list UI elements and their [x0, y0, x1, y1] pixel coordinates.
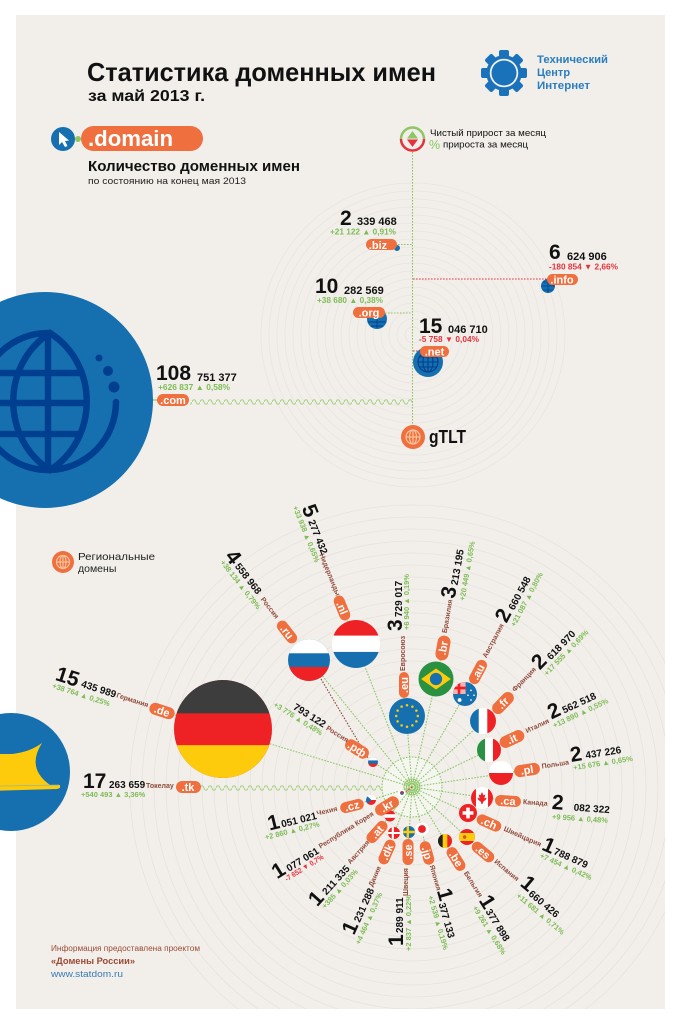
- label: .au Австралия: [458, 561, 545, 690]
- Tokelau circle: [0, 713, 70, 831]
- label: .ca Канада: .ca: [500, 795, 517, 808]
- label: .be Бельгия: [437, 840, 525, 957]
- flag: Denmark: [388, 827, 400, 839]
- label: .ru Россия: +38 134 ▲ 0,79%: [218, 558, 263, 611]
- label: .ru Россия: Россия: [259, 596, 280, 620]
- flag: Spain: [459, 829, 475, 845]
- legend text: Чистый прирост за месяц: [430, 128, 547, 139]
- label: .cz Чехия: 051 021: [280, 811, 318, 830]
- label: .es Испания: 1: [516, 871, 540, 897]
- label: .de Германия: 435 989: [80, 679, 118, 701]
- label: .рф Россия: [272, 692, 372, 764]
- stat: .com: +626 837 ▲ 0,58%: [158, 383, 230, 392]
- label: .kr Республика Корея: 077 061: [285, 846, 322, 874]
- label: .au Австралия: 660 548: [507, 575, 534, 612]
- label: .nl Нидерланды: +33 938 ▲ 0,65%: [291, 505, 322, 564]
- label: .cz Чехия: [259, 790, 367, 842]
- label: .it Италия: Италия: [525, 718, 551, 735]
- .domain badge: .domain: [88, 126, 173, 151]
- legend text: [429, 128, 547, 152]
- label: .pl Польша: 2: [568, 742, 584, 767]
- label: .es Испания: .es: [473, 843, 492, 862]
- label: .es Испания: Испания: [493, 859, 520, 883]
- stat: .com: 108: [156, 362, 191, 385]
- label: .fr Франция: Франция: [511, 666, 538, 694]
- label: .eu Евросоюз: 3: [384, 619, 407, 631]
- label: .se Швеция: Швеция: [403, 868, 410, 896]
- label: .se Швеция: .se: [403, 844, 415, 860]
- label: .se Швеция: 289 911: [395, 897, 406, 933]
- stat: .org: 10: [315, 275, 338, 298]
- label: .br Бразилия: Бразилия: [442, 599, 454, 634]
- label: .it Италия: +13 890 ▲ 0,55%: [551, 696, 610, 730]
- flag: Poland: [489, 761, 513, 785]
- label: .br Бразилия: .br: [437, 639, 451, 656]
- label: .dk Дания: 1: [338, 918, 363, 938]
- label: .kr Республика Корея: 1: [268, 858, 290, 884]
- label: .cz Чехия: .cz: [344, 799, 361, 814]
- label: .рф Россия: Россия: [325, 725, 349, 744]
- stat: .biz: 339 468: [357, 216, 397, 228]
- label: .jp Япония: [411, 837, 470, 951]
- label: .nl Нидерланды: 277 432: [305, 518, 329, 556]
- label: .fr Франция: [484, 614, 591, 723]
- label: .cz Чехия: 1: [265, 810, 282, 836]
- label: .eu Евросоюз: 729 017: [394, 580, 405, 617]
- flag: Belgium: [438, 834, 452, 848]
- globe: .com: [0, 292, 153, 508]
- label: .au Австралия: .au: [470, 663, 488, 682]
- stat: .net: -5 758 ▼ 0,04%: [419, 335, 479, 344]
- label: .fr Франция: +17 555 ▲ 0,69%: [542, 628, 591, 677]
- heading: domain count: Количество доменных имен: [88, 158, 300, 175]
- flag: Russia small: [368, 757, 378, 767]
- label: .be Бельгия: 1: [474, 891, 500, 913]
- connector: Russia to .рф: [321, 679, 368, 758]
- label: .be Бельгия: +9 261 ▲ 0,68%: [471, 904, 508, 957]
- label: .at Австрия: Австрия: [347, 840, 371, 866]
- label: .se Швеция: [385, 839, 415, 951]
- legend: regional domains: [52, 551, 155, 575]
- label: .be Бельгия: Бельгия: [462, 870, 483, 899]
- label: .tk Токелау: 263 659: [109, 780, 146, 791]
- label: .ch Швейцария: 788 879: [552, 846, 590, 871]
- logo: Технический Центр Интернет: Интернет: [537, 80, 591, 92]
- stat: .net: 15: [419, 315, 443, 338]
- label: .de Германия: [51, 663, 179, 728]
- label: .рф Россия: .рф: [345, 739, 368, 760]
- label: .tk Токелау: 17: [83, 770, 106, 793]
- label: .tk Токелау: .tk: [182, 782, 195, 794]
- label: .рф Россия: +3 776 ▲ 0,48%: [272, 700, 325, 738]
- flag: Austria: [384, 810, 396, 822]
- label: .br Бразилия: +20 449 ▲ 0,65%: [458, 540, 477, 601]
- flag: Netherlands: [332, 620, 380, 668]
- label: .ca Канада: +9 956 ▲ 0,48%: [552, 812, 609, 825]
- label: .kr Республика Корея: .kr: [379, 798, 397, 815]
- stat: .info: [541, 241, 618, 293]
- stat: .info: 6: [549, 241, 561, 264]
- wave connector .com: [190, 399, 412, 405]
- stat: .net: [413, 315, 488, 377]
- label: .ca Канада: Канада: [523, 799, 548, 808]
- label: .pl Польша: +15 676 ▲ 0,65%: [573, 754, 634, 772]
- label: .es Испания: 660 426: [526, 889, 561, 921]
- stat: .net: .net: [425, 346, 445, 358]
- label: .be Бельгия: .be: [446, 849, 465, 869]
- label: .de Германия: .de: [152, 704, 171, 720]
- legend text: %: [429, 138, 440, 152]
- flag: Czechia: [366, 795, 376, 805]
- label: .ca Канада: 2: [551, 791, 564, 815]
- label: .ru Россия: [217, 546, 307, 650]
- flag: Sweden: [403, 826, 415, 838]
- label: .kr Республика Корея: [268, 787, 405, 887]
- label: .eu Евросоюз: .eu: [399, 677, 411, 693]
- label: .рф Россия: 793 122: [291, 702, 328, 731]
- label: .jp Япония: +2 539 ▲ 0,19%: [426, 894, 450, 951]
- flag: Russia: [288, 639, 330, 681]
- label: .fr Франция: 2: [527, 650, 552, 674]
- label: .pl Польша: 437 226: [585, 745, 623, 762]
- label: .fr Франция: .fr: [495, 695, 512, 712]
- footer: source: www.statdom.ru: [50, 969, 123, 980]
- label: .jp Япония: 377 133: [436, 902, 456, 940]
- footer: source: Информация предоставлена проектом: [51, 944, 200, 953]
- label: .nl Нидерланды: Нидерланды: [317, 553, 341, 597]
- flag: Italy: [477, 738, 501, 762]
- label: .dk Дания: .dk: [379, 842, 397, 862]
- stat: .com: 751 377: [197, 372, 237, 384]
- label: .at Австрия: 211 335: [321, 863, 353, 898]
- label: .eu Евросоюз: +6 940 ▲ 0,19%: [402, 574, 411, 630]
- stat: .info: 624 906: [567, 251, 607, 263]
- label: .jp Япония: Япония: [428, 864, 442, 891]
- label: .ru Россия: 4: [220, 546, 246, 569]
- label: .au Австралия: Австралия: [482, 623, 506, 659]
- label: .cz Чехия: Чехия: [316, 806, 338, 818]
- label: .tk Токелау: Токелау: [146, 783, 174, 790]
- label: .ca Канада: [494, 787, 611, 825]
- label: .pl Польша: .pl: [520, 764, 534, 778]
- stat: .biz: +21 122 ▲ 0,91%: [330, 228, 396, 236]
- label: .kr Республика Корея: -7 652 ▼ 0,7%: [283, 852, 325, 883]
- label: .be Бельгия: 377 898: [483, 907, 511, 944]
- label: .br Бразилия: 3: [437, 585, 462, 600]
- label: .it Италия: [492, 678, 610, 754]
- label: .se Швеция: 1: [385, 934, 408, 946]
- gTLD axis and connectors: [385, 152, 548, 426]
- logo: Технический Центр Интернет: Технический: [537, 54, 608, 66]
- label: .ch Швейцария: 1: [539, 833, 559, 859]
- label: .at Австрия: [304, 814, 397, 913]
- flag: Japan: [416, 822, 428, 836]
- stat: .net: 046 710: [448, 324, 488, 336]
- label: .at Австрия: .at: [369, 824, 387, 841]
- icon: gTLD: [401, 425, 425, 449]
- label: .jp Япония: .jp: [419, 845, 434, 861]
- label: .ru Россия: .ru: [277, 623, 295, 642]
- stat: .info: -180 854 ▼ 2,66%: [549, 262, 618, 272]
- stat: .com: [153, 362, 237, 407]
- footer: source: «Домены России»: [51, 956, 135, 966]
- label: .fr Франция: 618 970: [545, 629, 579, 663]
- label: .es Испания: +11 681 ▲ 0,71%: [515, 891, 567, 937]
- label: .it Италия: 562 518: [561, 691, 599, 716]
- stat: .org: [315, 275, 387, 329]
- label: .dk Дания: [335, 834, 406, 946]
- logo: Технический Центр Интернет: [481, 50, 608, 96]
- label: .at Австрия: +385 ▲ 0,03%: [320, 867, 360, 910]
- stat: .com: .com: [160, 395, 186, 407]
- label: .ch Швейцария: .ch: [479, 815, 499, 833]
- label: .pl Польша: Польша: [541, 759, 570, 771]
- label: .eu Евросоюз: Евросоюз: [400, 635, 407, 671]
- spokes from hub to flags: [162, 608, 527, 859]
- legend: regional domains: домены: [78, 563, 116, 575]
- label: .se Швеция: +2 837 ▲ 0,22%: [404, 895, 413, 951]
- label: .jp Япония: 1: [432, 886, 457, 904]
- flag: Switzerland: [459, 804, 477, 822]
- sub-heading: date: по состоянию на конец мая 2013: [88, 176, 246, 187]
- label: .nl Нидерланды: [291, 497, 364, 624]
- label: .nl Нидерланды: .nl: [333, 600, 349, 617]
- connector: .kr: [400, 787, 412, 796]
- .domain badge: [51, 126, 203, 151]
- label: .dk Дания: +4 464 ▲ 0,37%: [353, 891, 385, 946]
- flag: Germany: [174, 680, 272, 778]
- stat: .biz: [330, 207, 400, 252]
- label: .ru Россия: 558 968: [232, 561, 263, 597]
- label: .pl Польша: [511, 735, 634, 781]
- label: .ch Швейцария: Швейцария: [502, 825, 543, 849]
- label: .ch Швейцария: +7 454 ▲ 0,42%: [539, 851, 594, 882]
- label: .cz Чехия: +2 860 ▲ 0,27%: [264, 819, 321, 842]
- flag: France: [470, 708, 496, 734]
- label: .dk Дания: Дания: [368, 865, 383, 888]
- hub: centre of regional chart: [382, 757, 442, 817]
- label: .tk Токелау: +540 493 ▲ 3,36%: [81, 790, 146, 799]
- stat: .info: .info: [550, 274, 574, 286]
- title: Статистика доменных имен: [87, 57, 436, 87]
- label: .de Германия: 15: [53, 663, 82, 692]
- label: .de Германия: +38 764 ▲ 0,25%: [51, 681, 111, 708]
- stat: .org: 282 569: [344, 285, 384, 297]
- stat: .biz: 2: [340, 207, 352, 230]
- label: .ca Канада: 082 322: [573, 803, 611, 816]
- logo: Технический Центр Интернет: Центр: [537, 67, 570, 79]
- flag: Australia: [453, 682, 477, 706]
- label: .it Италия: .it: [505, 732, 520, 747]
- label: .dk Дания: 231 288: [352, 886, 377, 924]
- label: gTLT: gTLT: [429, 427, 466, 447]
- label: .eu Евросоюз: [384, 574, 411, 698]
- legend icon: growth: [401, 128, 424, 150]
- legend: regional domains: Региональные: [78, 551, 155, 563]
- label: .es Испания: [463, 831, 581, 937]
- flag: Korea: [398, 789, 406, 797]
- label: .br Бразилия: 213 195: [450, 548, 467, 586]
- stat: .org: +38 680 ▲ 0,38%: [317, 296, 383, 305]
- wave connector .tk: [201, 785, 399, 791]
- label: .nl Нидерланды: 5: [297, 501, 323, 521]
- stat: .org: .org: [359, 308, 379, 320]
- flag: Canada: [471, 787, 493, 809]
- footer: source: [50, 944, 200, 980]
- label: .br Бразилия: [426, 537, 477, 663]
- label: .kr Республика Корея: Республика Корея: [317, 810, 375, 850]
- label: .de Германия: Германия: [115, 692, 149, 709]
- gTLD concentric rings: [261, 183, 565, 487]
- label: .ch Швейцария: [472, 804, 601, 882]
- label: .tk Токелау: [81, 770, 201, 799]
- label: .it Италия: 2: [544, 698, 564, 724]
- label: .au Австралия: +21 087 ▲ 0,80%: [509, 570, 545, 628]
- legend text: прироста за месяц: [443, 140, 529, 150]
- stat: .biz: .biz: [369, 240, 388, 252]
- label: .au Австралия: 2: [491, 605, 516, 626]
- subtitle: за май 2013 г.: [88, 88, 205, 105]
- regional concentric rings: [130, 505, 678, 1024]
- label: .at Австрия: 1: [304, 886, 329, 911]
- flag: EU: [389, 698, 425, 734]
- flag: Brazil: [418, 662, 454, 696]
